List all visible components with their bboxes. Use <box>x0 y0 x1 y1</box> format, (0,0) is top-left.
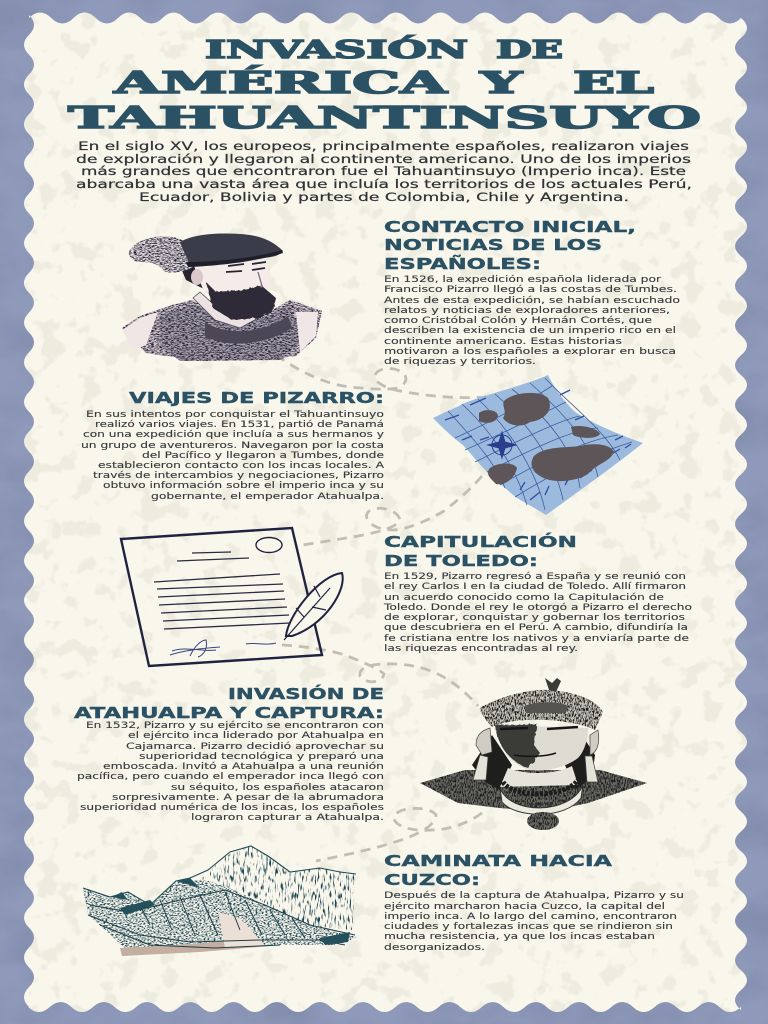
body text <box>77 720 384 823</box>
dashed route: Atahualpa to mountain <box>316 808 482 861</box>
body text: Después de la captura de Atahualpa, Pizarro y su <box>384 890 684 901</box>
intro text block: más grandes que encontraron fue el Tahuantinsuyo (Imperio inca). Este <box>81 164 686 178</box>
collar plate <box>500 785 583 814</box>
intro text block <box>76 139 692 204</box>
body text: Toledo. Donde el rey le otorgó a Pizarro el derecho <box>383 602 692 613</box>
heading <box>384 218 636 273</box>
scarf band <box>205 316 292 344</box>
body text: fe cristiana entre los nativos y a enviaría parte de <box>384 633 689 644</box>
headdress <box>480 690 603 730</box>
pendant <box>527 812 559 830</box>
body text: describen la existencia de un imperio rico en el <box>384 325 676 336</box>
body text <box>384 890 684 953</box>
dark hair <box>472 735 595 790</box>
face <box>194 256 270 300</box>
heading: CUZCO: <box>384 871 480 889</box>
cape and shoulders <box>122 300 322 361</box>
icon: signed document with quill <box>121 528 343 666</box>
body text: En 1526, la expedición española liderada por <box>384 274 661 285</box>
seal <box>256 538 282 552</box>
islands <box>503 393 550 425</box>
heading <box>384 852 613 889</box>
heading: VIAJES DE PIZARRO: <box>129 389 384 407</box>
title: DE <box>496 35 563 64</box>
title: AMÉRICA <box>112 65 449 100</box>
body text <box>384 274 681 367</box>
body text: el rey Carlos I en la ciudad de Toledo. Allí firmaron <box>384 581 686 592</box>
sheet <box>433 375 643 515</box>
section: invasión de Atahualpa y captura <box>74 684 384 823</box>
section: viajes de Pizarro <box>81 389 385 502</box>
feather <box>129 236 198 273</box>
section: contacto inicial <box>384 218 681 367</box>
terrace lines <box>88 890 355 948</box>
terraces and ruins <box>83 880 357 953</box>
icon: treasure map <box>433 375 643 515</box>
body text: Francisco Pizarro llegó a las costas de Tumbes. <box>384 284 677 295</box>
body text: del Pacífico y llegaron a Tumbes, donde <box>142 450 384 461</box>
body text: motivaron a los españoles a explorar en busca <box>384 346 676 357</box>
hair <box>180 262 210 292</box>
icon: Andean mountain sketch <box>83 846 357 956</box>
hat crown and brim <box>180 233 283 264</box>
quill feather <box>286 573 343 636</box>
body text: emboscada. Invitó a Atahualpa a una reunión <box>103 761 384 772</box>
body text: con una expedición que incluía a sus hermanos y <box>83 429 385 440</box>
brows and mouth <box>500 727 578 729</box>
heading <box>384 532 577 570</box>
intro text block: abarcaba una vasta área que incluía los territorios de los actuales Perú, <box>76 177 692 191</box>
heading: CAMINATA HACIA <box>384 852 613 870</box>
pale drapes <box>122 312 318 352</box>
title: TAHUANTINSUYO <box>68 100 701 135</box>
mountain face <box>200 846 356 930</box>
title: EL <box>573 65 654 100</box>
body text: superioridad numérica de los incas, los españoles <box>80 802 384 813</box>
body text: En 1532, Pizarro y su ejército se encontraron con <box>86 720 384 731</box>
intro text block: En el siglo XV, los europeos, principalmente españoles, realizaron viajes <box>78 139 689 153</box>
body text: En 1529, Pizarro regresó a España y se reunió con <box>384 571 686 582</box>
body text: un acuerdo conocido como la Capitulación de <box>384 592 664 603</box>
heading: CONTACTO INICIAL, <box>384 218 636 236</box>
mountain outline <box>83 846 356 905</box>
body text: continente americano. Estas historias <box>384 336 622 347</box>
text lines <box>154 552 290 629</box>
heading: ATAHUALPA Y CAPTURA: <box>74 704 384 722</box>
intro text block: Ecuador, Bolivia y partes de Colombia, Chile y Argentina. <box>139 190 629 204</box>
signatures <box>170 640 276 657</box>
body text: relatos y noticias de exploradores anteriores, <box>384 305 670 316</box>
face shadow side <box>495 724 540 768</box>
dark foliage patches <box>112 878 350 945</box>
heading: DE TOLEDO: <box>384 552 538 570</box>
body text: su séquito, los españoles atacaron <box>171 782 384 793</box>
heading: INVASIÓN DE <box>228 684 384 703</box>
body text: desorganizados. <box>384 942 485 953</box>
heading: CAPITULACIÓN <box>384 532 577 551</box>
ear ornaments <box>476 728 599 755</box>
beard <box>206 282 276 320</box>
ground wash <box>120 940 270 956</box>
body text: mucha resistencia, ya que los incas estaban <box>384 931 655 942</box>
body text: de explorar, conquistar y gobernar los territorios <box>384 612 685 623</box>
grid lines <box>448 378 632 510</box>
body text <box>81 409 385 502</box>
heading: ESPAÑOLES: <box>384 254 541 273</box>
body text: pacífica, pero cuando el emperador inca llegó con <box>77 771 384 782</box>
section: caminata hacia Cuzco <box>384 852 684 953</box>
body text: En sus intentos por conquistar el Tahuantinsuyo <box>86 409 384 420</box>
body text: de riquezas y territorios. <box>384 356 536 367</box>
body text: gobernante, el emperador Atahualpa. <box>151 491 384 502</box>
body text: Cajamarca. Pizarro decidió aprovechar su <box>126 741 384 752</box>
body text: como Cristóbal Colón y Hernán Cortés, que <box>384 315 652 326</box>
neck <box>500 766 578 787</box>
dash marks <box>445 390 631 500</box>
face light side <box>495 725 588 770</box>
body text: el ejército inca liderado por Atahualpa en <box>128 730 384 741</box>
section: capitulación de Toledo <box>383 532 692 654</box>
dashed route: portrait to map <box>276 355 488 398</box>
body text: superioridad tecnológica y preparó una <box>139 751 384 762</box>
body text: que descubriera en el Perú. A cambio, difundiría la <box>384 622 688 633</box>
body text: sorpresivamente. A pesar de la abrumadora <box>112 792 384 803</box>
icon: Pizarro portrait <box>122 233 322 361</box>
title: INVASIÓN <box>205 35 468 64</box>
beaded necklace <box>503 780 578 794</box>
body text: las riquezas encontradas al rey. <box>384 643 578 654</box>
dashed route: document to Atahualpa <box>282 645 478 706</box>
body text: imperio inca. A lo largo del camino, encontraron <box>384 911 677 922</box>
doublet <box>160 304 302 361</box>
body text: Antes de esta expedición, se habían escuchado <box>384 295 681 306</box>
dashed route: map to document <box>303 476 482 545</box>
body text: través de intercambios y negociaciones, Pizarro <box>93 470 384 481</box>
body text: realizó varios viajes. En 1531, partió de Panamá <box>95 419 384 430</box>
body text: obtuvo información sobre el imperio inca y su <box>103 480 384 491</box>
body text: ejército marcharon hacia Cuzco, la capital del <box>384 901 665 912</box>
body text: un grupo de aventureros. Navegaron por la costa <box>81 440 384 451</box>
heading <box>74 684 384 722</box>
title: Y <box>478 65 524 100</box>
body text: lograron capturar a Atahualpa. <box>191 812 384 823</box>
ruff collar <box>193 292 262 328</box>
intro text block: de exploración y llegaron al continente americano. Uno de los imperios <box>76 152 691 166</box>
body text: establecieron contacto con los incas locales. A <box>98 460 385 471</box>
document sheet <box>121 528 322 666</box>
icon: Atahualpa portrait <box>420 678 647 830</box>
compass rose <box>488 432 516 458</box>
body text: ciudades y fortalezas incas que se rindieron sin <box>384 921 673 932</box>
heading: NOTICIAS DE LOS <box>384 236 602 254</box>
shoulders <box>420 770 647 812</box>
title <box>68 35 701 135</box>
body text <box>383 571 692 654</box>
